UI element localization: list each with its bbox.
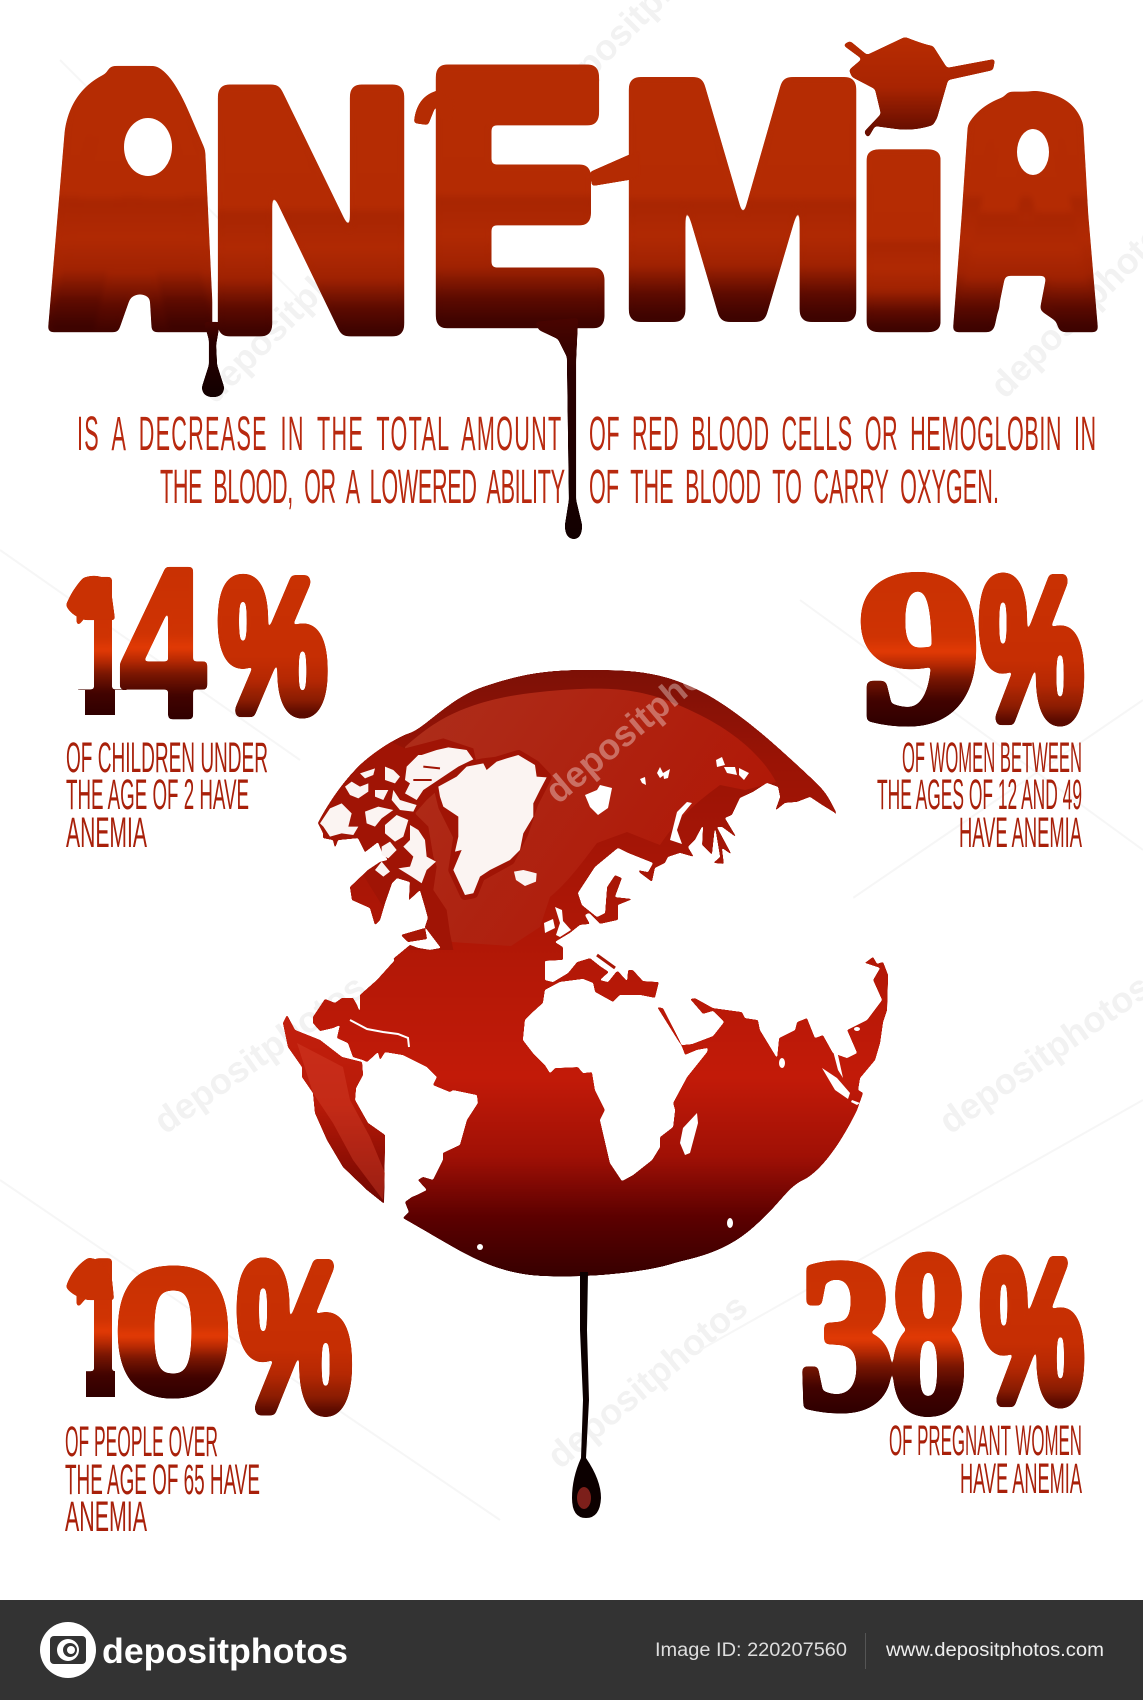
definition text: THE BLOOD, OR A LOWERED ABILITY bbox=[160, 459, 565, 513]
adriatic sea bbox=[597, 955, 615, 968]
lighter arctic sea bbox=[405, 689, 776, 946]
dark halo around Canada and Greenland bbox=[317, 738, 547, 950]
caption 10% bbox=[65, 1418, 260, 1541]
letter I: I bbox=[854, 105, 954, 377]
caption 14% bbox=[66, 734, 268, 857]
title: ANEMIA bbox=[48, 0, 1098, 539]
figure 10%: 1 bbox=[71, 1219, 130, 1435]
arctic shading clipped to ocean bbox=[317, 689, 776, 950]
caption 10%: OF PEOPLE OVER bbox=[65, 1418, 218, 1466]
counter of last A bbox=[1017, 129, 1049, 175]
definition text: IS A DECREASE IN THE TOTAL AMOUNT bbox=[77, 406, 561, 460]
caption 14%: ANEMIA bbox=[66, 809, 147, 857]
logo icon: camera bbox=[40, 1622, 96, 1678]
website: www.depositphotos.com bbox=[885, 1640, 1104, 1661]
blood drips and splat on title bbox=[202, 37, 995, 539]
figure 10%: % bbox=[238, 1223, 351, 1453]
blood drip under globe bbox=[572, 1272, 601, 1518]
figure 38% bbox=[799, 1205, 1083, 1461]
figure 38%: 3 bbox=[799, 1215, 894, 1454]
greenland and canadian islands bbox=[320, 747, 547, 895]
stat: 10% bbox=[65, 1219, 351, 1541]
caribbean islands bbox=[350, 1020, 409, 1047]
figure 9%: % bbox=[980, 538, 1083, 761]
figure 10%: 0 bbox=[112, 1232, 234, 1433]
definition text: OF RED BLOOD CELLS OR HEMOGLOBIN IN bbox=[589, 406, 1096, 460]
letter N: N bbox=[208, 23, 415, 398]
pacific highlight bbox=[297, 1043, 385, 1200]
letter A, final: A bbox=[957, 34, 1095, 392]
eurasia and africa landmass bbox=[523, 783, 882, 1181]
letter A: A bbox=[53, 0, 211, 397]
footer bar bbox=[0, 1600, 1143, 1700]
figure 14%: 1 bbox=[71, 539, 130, 753]
figure 10% bbox=[66, 1219, 351, 1453]
stat: 14%: THE AGE OF 2 HAVE bbox=[66, 771, 249, 819]
caption 38% bbox=[889, 1417, 1082, 1503]
stat: 14%: OF CHILDREN UNDER bbox=[66, 734, 268, 782]
blood globe bbox=[278, 633, 888, 1518]
ocean body of globe bbox=[278, 670, 888, 1276]
figure 38%: 8 bbox=[891, 1205, 966, 1461]
stat: 9% bbox=[859, 526, 1083, 857]
figure 14% bbox=[66, 525, 327, 762]
stat: 14% bbox=[66, 525, 327, 857]
globe watermark: depositphoto bbox=[537, 633, 738, 811]
logo text: depositphotos bbox=[102, 1632, 348, 1671]
watermark: depositphotos bbox=[192, 206, 396, 411]
islands of the old world bbox=[477, 757, 860, 1250]
blood pool behind last A bbox=[953, 91, 1098, 332]
image id: Image ID: 220207560 bbox=[655, 1640, 847, 1661]
figure 14%: % bbox=[219, 542, 327, 751]
letter M: M bbox=[618, 17, 867, 382]
watermark: depositphotos bbox=[539, 1285, 755, 1476]
stat: 38% bbox=[799, 1205, 1083, 1503]
figure 38%: % bbox=[981, 1221, 1083, 1443]
definition text bbox=[77, 406, 1096, 513]
definition text: OF THE BLOOD TO CARRY OXYGEN. bbox=[589, 459, 999, 513]
caption 10%: ANEMIA bbox=[65, 1493, 147, 1541]
blood pool behind first A bbox=[48, 66, 212, 332]
figure 9% bbox=[859, 526, 1083, 767]
figure 9%: 9 bbox=[859, 526, 980, 767]
watermark: depositphotos bbox=[146, 966, 373, 1142]
stat: 10%: THE AGE OF 65 HAVE bbox=[65, 1456, 260, 1504]
letter E: E bbox=[426, 0, 607, 393]
counter of first A bbox=[124, 118, 172, 176]
title letters bbox=[48, 0, 1098, 398]
caption 9% bbox=[877, 734, 1082, 857]
figure 14%: 4 bbox=[120, 525, 206, 762]
